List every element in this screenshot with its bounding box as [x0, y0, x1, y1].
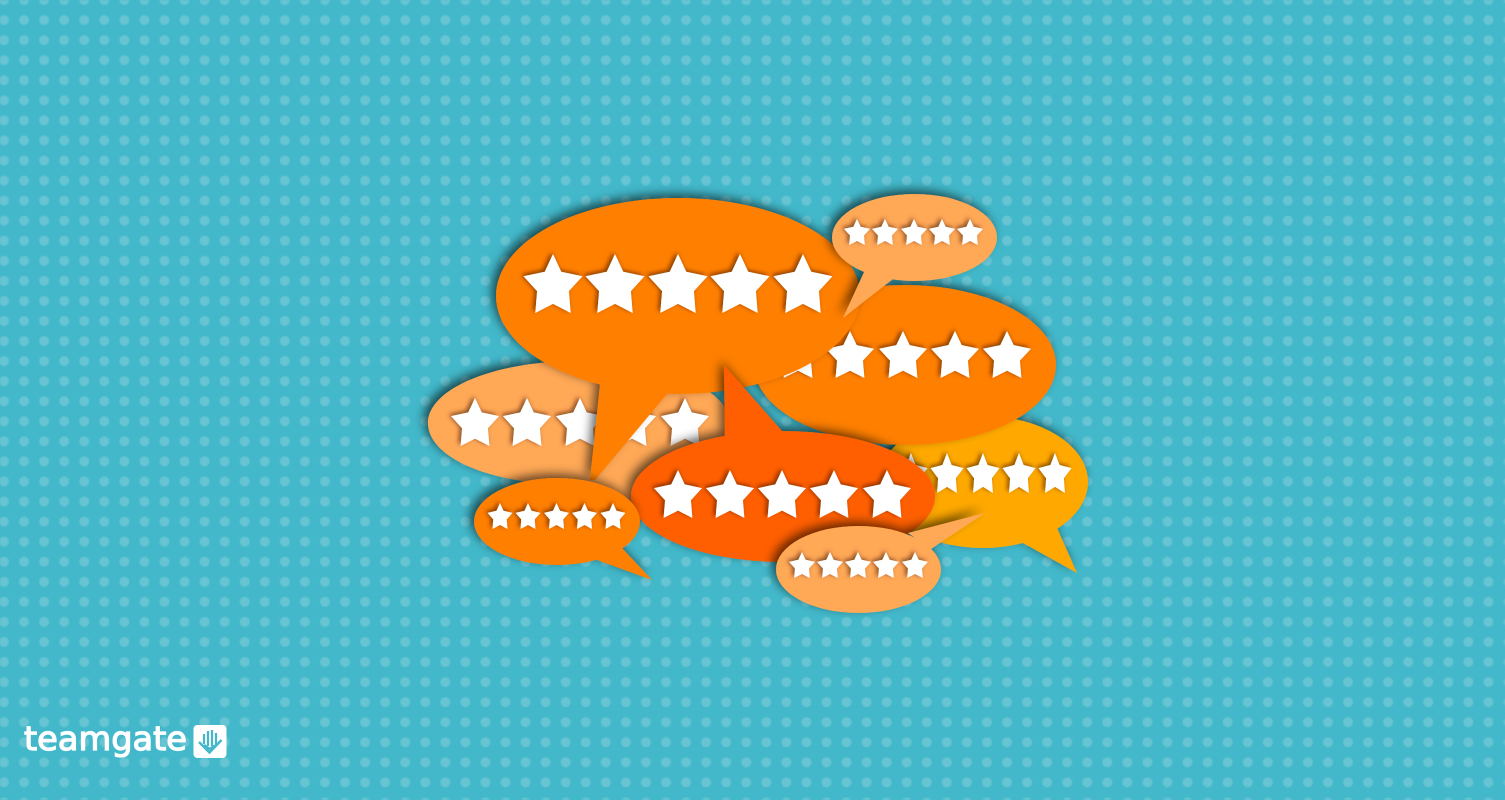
speech bubble: peach bottom [776, 513, 985, 613]
speech bubble: red-orange centre [631, 365, 935, 562]
speech bubble: peach top [832, 194, 997, 318]
wordmark: teamgate [24, 719, 187, 758]
logo: teamgate wordmark and icon [24, 719, 226, 758]
icon: hand in rounded square [194, 725, 226, 758]
speech bubble: small orange [474, 478, 652, 580]
speech bubble: orange right [754, 285, 1056, 445]
speech bubble: peach left [428, 361, 730, 508]
speech bubble: yellow right [878, 416, 1088, 573]
speech bubble: large orange [496, 198, 860, 480]
